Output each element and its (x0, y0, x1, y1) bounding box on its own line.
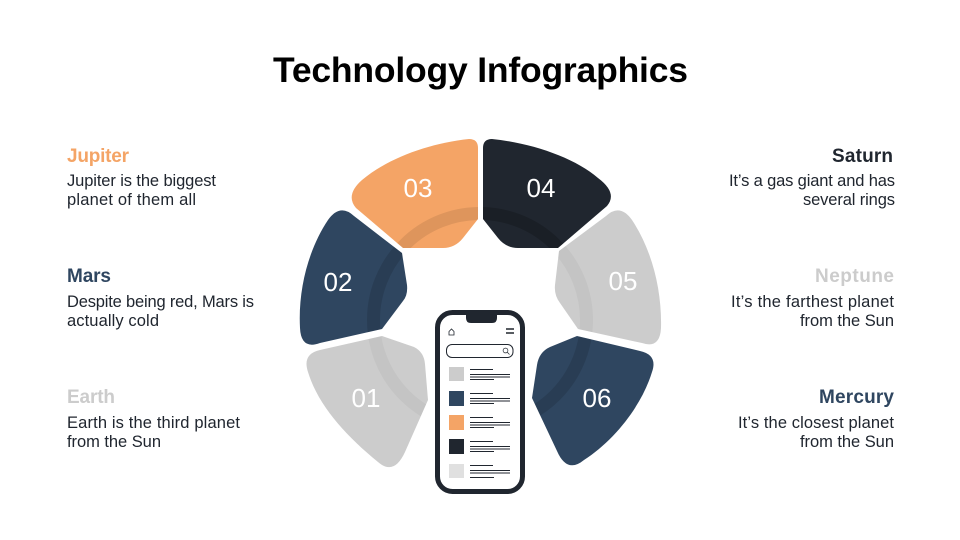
text block: Saturn: It’s a gas giant and has (729, 172, 895, 190)
segment 02 (300, 210, 408, 345)
segment 06: 06 (583, 383, 611, 413)
text block: Mercury: from the Sun (800, 433, 894, 451)
text block: Mercury: It’s the closest planet (738, 414, 894, 432)
text block: Jupiter: Jupiter is the biggest (67, 172, 216, 190)
text block: Earth: Earth is the third planet (67, 414, 240, 432)
icon: smartphone (438, 312, 522, 492)
text block: Saturn (729, 146, 895, 209)
text block: Mercury (738, 387, 894, 451)
text block: Earth: Earth (67, 387, 115, 408)
segment 03 (352, 139, 478, 248)
text block: Saturn: several rings (803, 191, 895, 209)
text block: Neptune: Neptune (815, 266, 894, 287)
segment 05: 05 (609, 266, 637, 296)
list rows (449, 367, 510, 478)
segment 04 (483, 139, 611, 248)
text block: Neptune (731, 266, 894, 330)
text block: Earth (67, 387, 240, 451)
text block: Jupiter (67, 146, 216, 209)
text block: Mercury: Mercury (819, 387, 894, 408)
segment 06 (532, 336, 654, 466)
text block: Mars: Mars (67, 266, 111, 287)
segment 03: 03 (404, 173, 432, 203)
segment 01: 01 (352, 383, 380, 413)
text block: Mars: actually cold (67, 312, 159, 330)
segment 04: 04 (527, 173, 555, 203)
icon: menu (506, 329, 514, 333)
text block: Mars: Despite being red, Mars is (67, 293, 254, 311)
segment 02: 02 (324, 267, 352, 297)
search bar (446, 344, 513, 358)
text block: Mars (67, 266, 254, 330)
text block: Neptune: from the Sun (800, 312, 894, 330)
text block: Jupiter: Jupiter (67, 146, 130, 167)
text block: Earth: from the Sun (67, 433, 161, 451)
segment 05 (554, 210, 661, 344)
icon: home (449, 329, 454, 335)
text block: Jupiter: planet of them all (67, 191, 196, 209)
text block: Saturn: Saturn (832, 146, 893, 167)
text block: Neptune: It’s the farthest planet (731, 293, 894, 311)
title: Technology Infographics (273, 50, 688, 90)
segment 01 (306, 336, 428, 468)
